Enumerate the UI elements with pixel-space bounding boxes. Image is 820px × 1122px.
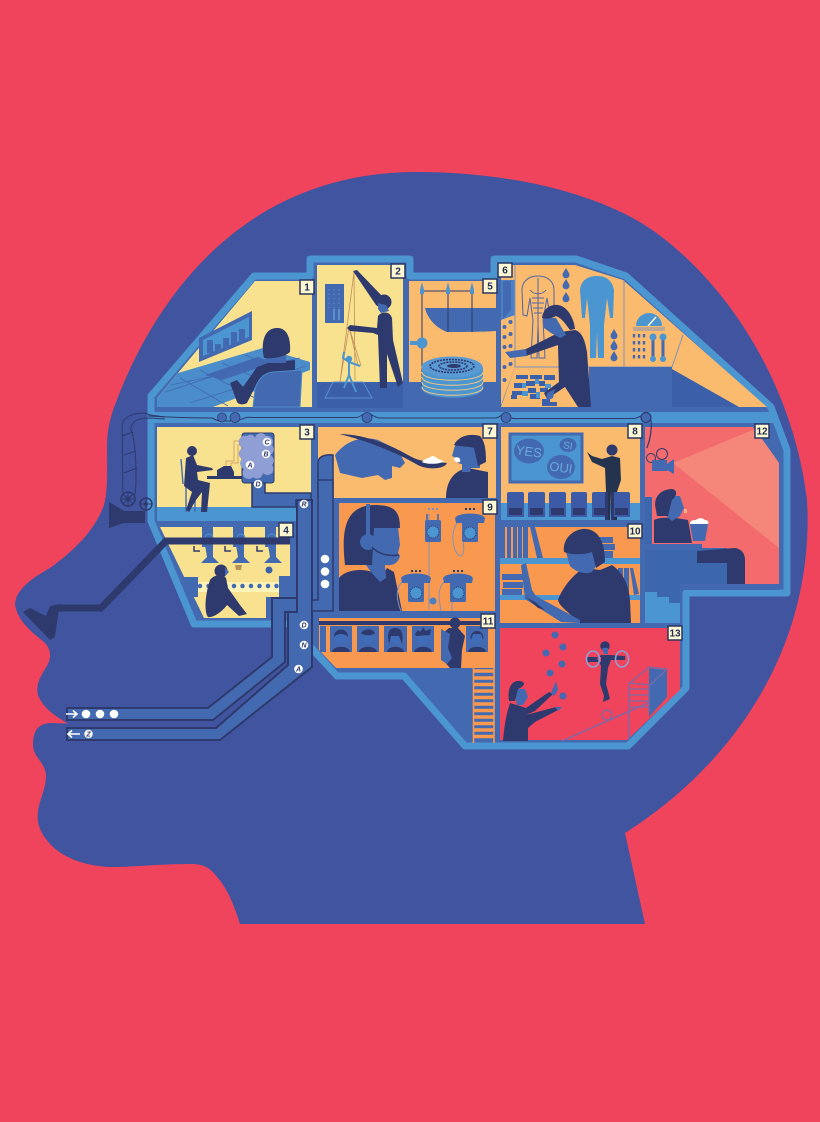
film projector xyxy=(109,413,165,528)
number label 2 xyxy=(391,264,405,278)
sliders xyxy=(653,338,663,360)
picture rail xyxy=(319,621,495,625)
portrait two xyxy=(357,626,379,652)
number label 4 xyxy=(279,523,293,537)
wall phone four xyxy=(439,571,473,611)
number label 8: 8 xyxy=(632,426,638,438)
room 2: puppeteer xyxy=(317,265,403,408)
popcorn box xyxy=(690,524,708,541)
number label 9: 9 xyxy=(487,502,493,514)
pendulum rig xyxy=(421,291,473,385)
wall phone two xyxy=(453,509,485,556)
memory tank xyxy=(242,433,274,483)
neck xyxy=(266,355,286,363)
reader face xyxy=(566,552,600,573)
room 13: juggling and balancing xyxy=(500,628,680,741)
reader hair xyxy=(564,529,605,568)
coil stack xyxy=(422,367,483,398)
arm conduit xyxy=(318,455,333,498)
operator hair xyxy=(344,505,400,565)
letter R xyxy=(300,500,308,508)
number label 13: 13 xyxy=(669,628,681,640)
number label 4: 4 xyxy=(283,526,289,536)
teacher xyxy=(587,452,621,520)
viewer head xyxy=(665,496,684,521)
food xyxy=(422,456,444,464)
room 11: portrait gallery xyxy=(319,618,495,743)
word YES: YES xyxy=(515,442,543,461)
viewer legs xyxy=(697,548,745,584)
number label 8 xyxy=(628,424,642,438)
headset xyxy=(366,504,370,535)
number label 10: 10 xyxy=(629,526,641,538)
letter A in pipe xyxy=(294,665,303,674)
number label 13 xyxy=(668,626,682,640)
room 4: factory line xyxy=(160,527,297,618)
portrait four xyxy=(412,626,434,652)
scientist xyxy=(524,330,591,407)
number label 12: 12 xyxy=(756,426,768,438)
room 7: feeding spoon xyxy=(318,427,496,498)
letter D: D xyxy=(301,622,307,630)
seats xyxy=(507,492,630,517)
step block xyxy=(645,584,680,623)
portrait five xyxy=(466,626,488,652)
arrow out and letter Z xyxy=(68,730,93,738)
number label 1 xyxy=(300,280,314,294)
number label 5 xyxy=(483,279,497,293)
room 10: library xyxy=(500,527,640,623)
tank letter C: C xyxy=(264,440,270,446)
film strip xyxy=(122,413,165,495)
letter N: N xyxy=(301,642,307,650)
inspector figure xyxy=(442,628,465,668)
wall phone one xyxy=(425,509,441,610)
tightrope xyxy=(562,683,648,741)
number label 10 xyxy=(628,524,642,538)
number label 12 xyxy=(755,424,769,438)
portrait one xyxy=(330,626,352,652)
middle conduit with dots xyxy=(312,480,333,611)
letter D xyxy=(300,621,308,630)
floor xyxy=(589,367,672,407)
chalkboard xyxy=(510,434,582,482)
portrait three xyxy=(384,626,407,652)
number label 3: 3 xyxy=(304,428,310,438)
wall screen xyxy=(199,311,252,362)
wall lines xyxy=(515,265,683,367)
eater xyxy=(446,468,488,498)
arrow out and letter Z: Z xyxy=(85,732,91,738)
open book xyxy=(521,563,580,623)
strings xyxy=(340,272,361,382)
number label 1: 1 xyxy=(304,282,310,294)
tank letter C xyxy=(263,438,271,446)
room 12: cinema xyxy=(645,427,779,623)
tank letter D: D xyxy=(255,482,261,488)
letter A in pipe: A xyxy=(295,666,301,674)
letter R: R xyxy=(301,502,307,508)
number label 9 xyxy=(483,500,497,514)
operator face xyxy=(366,527,400,582)
projector beam xyxy=(673,429,779,548)
gauge xyxy=(636,313,662,326)
person xyxy=(230,360,295,404)
number label 7 xyxy=(483,424,497,438)
upper channel to mouth xyxy=(67,598,297,720)
number label 3 xyxy=(300,425,314,439)
chair xyxy=(253,370,302,407)
room 5: pendulums and coil xyxy=(409,281,496,408)
room 8: language class xyxy=(501,427,640,520)
number label 11: 11 xyxy=(483,616,494,628)
tank letter B xyxy=(262,450,270,458)
word SI: SI xyxy=(562,440,573,453)
anatomy chart xyxy=(522,276,554,358)
letter N xyxy=(300,641,308,650)
ladder xyxy=(474,668,494,743)
channel R: vertical letter pipe xyxy=(67,500,312,740)
word OUI: OUI xyxy=(548,458,573,477)
conveyor xyxy=(195,582,285,592)
items xyxy=(235,565,242,570)
seated woman xyxy=(206,575,247,617)
number label 2: 2 xyxy=(395,266,401,278)
viewer body xyxy=(654,518,692,543)
corridor band xyxy=(148,412,775,423)
spoon xyxy=(339,434,447,468)
desk xyxy=(157,348,310,407)
typist xyxy=(184,455,213,512)
shelves xyxy=(500,558,640,564)
books xyxy=(500,527,639,595)
operator body xyxy=(339,568,402,611)
puppet xyxy=(343,352,360,392)
dial xyxy=(416,338,428,348)
nose pipe xyxy=(23,541,290,640)
number label 6: 6 xyxy=(502,266,508,276)
side wall xyxy=(501,280,515,407)
machines xyxy=(201,527,282,563)
number label 5: 5 xyxy=(487,282,493,292)
stack of pages xyxy=(649,668,667,717)
chair xyxy=(181,459,196,512)
tank letter A xyxy=(246,461,254,470)
control panel xyxy=(325,284,344,323)
room 3: typist and memory tank xyxy=(157,427,311,521)
juggler xyxy=(503,692,558,741)
room 6: body lab xyxy=(501,265,767,407)
keyboard xyxy=(205,357,273,380)
cinema seat xyxy=(645,497,727,584)
tank letter A: A xyxy=(246,462,253,470)
head silhouette xyxy=(15,172,808,924)
tank letter D xyxy=(254,480,262,488)
wall phone three xyxy=(397,571,431,611)
conduit to channel xyxy=(252,483,311,507)
hand xyxy=(335,438,405,480)
room 9: phone operator xyxy=(339,503,495,611)
reader body xyxy=(558,565,631,623)
number label 11 xyxy=(481,614,495,628)
pipe bar xyxy=(165,538,290,544)
puppeteer figure xyxy=(347,270,403,388)
hair xyxy=(263,328,290,358)
brain frame xyxy=(151,259,787,746)
acrobat xyxy=(586,655,625,702)
speech dots and arrow in xyxy=(66,710,118,718)
juggling balls xyxy=(542,632,566,700)
room 1: analyst at desk xyxy=(157,281,312,407)
dots in middle conduit xyxy=(321,555,329,588)
desk xyxy=(207,476,243,479)
typewriter xyxy=(217,466,234,476)
cinema camera xyxy=(646,448,674,474)
speech bubbles xyxy=(514,438,544,464)
wires xyxy=(226,441,243,466)
body silhouette xyxy=(580,276,614,358)
drops xyxy=(562,268,618,361)
control dots xyxy=(634,334,644,360)
number label 7: 7 xyxy=(487,426,493,438)
tank letter B: B xyxy=(263,452,269,458)
floor grid xyxy=(511,375,557,406)
number label 6 xyxy=(498,263,512,277)
steps xyxy=(645,592,680,623)
carpet xyxy=(325,382,372,398)
dish xyxy=(425,308,496,332)
signal wire xyxy=(148,412,651,448)
